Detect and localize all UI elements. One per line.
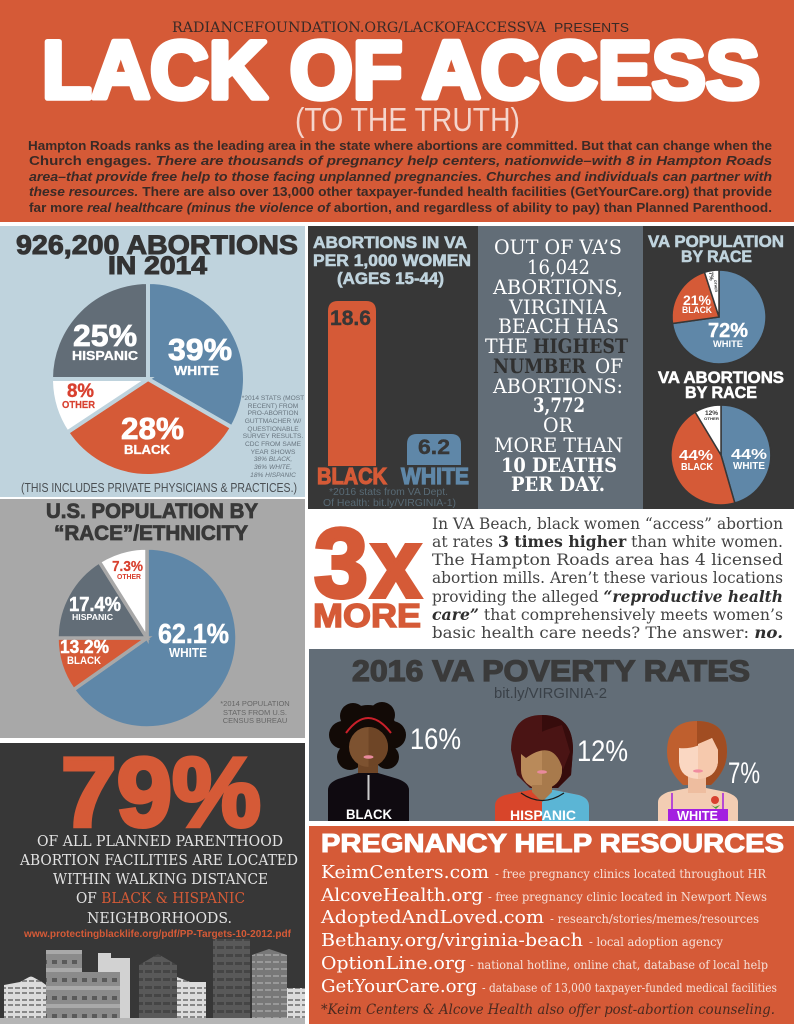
panel: Virginia Beach statement: 10 DEATHS — [501, 454, 617, 477]
big stat: MORE — [313, 597, 421, 634]
resource list — [320, 862, 777, 997]
heading — [313, 233, 471, 288]
footnote: 38% BLACK, — [254, 456, 292, 463]
panel: 3x more — [313, 508, 783, 642]
statement: OF BLACK & HISPANIC — [76, 889, 245, 907]
panel: Virginia Beach statement: 3,772 — [533, 394, 585, 417]
bar: white: WHITE — [401, 463, 469, 489]
pie labels: 28% — [121, 411, 184, 446]
footnote — [323, 487, 456, 509]
big number: 79% — [61, 737, 261, 847]
statement: ABORTION FACILITIES ARE LOCATED — [19, 851, 298, 869]
figure: hispanic woman: HISPANIC — [510, 808, 576, 823]
paragraph: abortion mills. Aren’t these various locations — [432, 569, 783, 587]
panel: 79 percent — [0, 737, 305, 1024]
pie labels — [60, 558, 229, 667]
footnote: STATS FROM U.S. — [223, 708, 287, 717]
pie labels: 17.4% — [69, 594, 121, 616]
labels: VA abortions: 44% — [679, 447, 713, 464]
panel: Virginia Beach statement: VIRGINIA — [508, 296, 608, 319]
big stat — [313, 508, 421, 634]
resource list: - research/stories/memes/resources — [550, 912, 759, 926]
bar: black — [317, 301, 387, 489]
labels: VA population: 72% — [708, 320, 748, 342]
big stat: 3 — [314, 508, 368, 618]
footnote: PRO-ABORTION — [248, 410, 299, 417]
pie labels: 25% — [73, 318, 137, 353]
panel: Virginia Beach statement: 16,042 — [527, 256, 590, 279]
footnote: SURVEY RESULTS. — [243, 433, 303, 440]
resource list: AdoptedAndLoved.com — [320, 907, 544, 928]
pie chart: abortions by race — [51, 282, 245, 476]
label: 12%: 12% — [577, 735, 628, 768]
panel: Virginia Beach statement: OUT OF VA’S — [494, 236, 622, 259]
heading — [46, 500, 258, 545]
subtitle: (TO THE TRUTH) — [295, 101, 520, 138]
labels: VA population: WHITE — [713, 339, 743, 350]
heading: VA abortions: VA ABORTIONS — [658, 368, 784, 387]
panel: U.S. population — [0, 499, 305, 738]
note: (THIS INCLUDES PRIVATE PHYSICIANS & PRACTICES.) — [21, 480, 297, 495]
intro text: Hampton Roads ranks as the leading area in the state where abortions are committed. But that can change when the — [28, 138, 772, 153]
pie labels — [62, 318, 232, 457]
paragraph: providing the alleged “reproductive health — [432, 587, 783, 606]
paragraph: In VA Beach, black women “access” abortion — [432, 515, 783, 533]
title: LACK OF ACCESS — [42, 25, 760, 116]
pie chart: population — [57, 548, 237, 728]
footnote: *2014 POPULATION — [220, 699, 290, 708]
heading: VA population: BY RACE — [681, 247, 752, 266]
paragraph: basic health care needs? The answer: no. — [432, 623, 783, 642]
heading: U.S. POPULATION BY — [46, 500, 258, 523]
pie labels: HISPANIC — [72, 612, 113, 622]
resource list: KeimCenters.com — [321, 862, 489, 883]
resource list: AlcoveHealth.org — [320, 885, 483, 906]
labels: VA abortions: 12% — [705, 411, 719, 417]
resource list: - national hotline, online chat, database of local help — [470, 958, 768, 972]
heading: VA abortions: BY RACE — [685, 383, 757, 402]
labels: VA population — [682, 272, 748, 350]
heading: (AGES 15-44) — [337, 269, 444, 288]
labels: VA abortions: BLACK — [681, 462, 714, 473]
intro text: far more real healthcare (minus the violence of abortion, and regardless of ability to pay) than Planned Parenthood. — [29, 200, 772, 215]
resource list: - local adoption agency — [589, 935, 723, 949]
footnote: Of Health: bit.ly/VIRGINIA-1) — [323, 498, 456, 509]
footer note: *Keim Centers & Alcove Health also offer post-abortion counseling. — [321, 1002, 775, 1018]
bar: white — [401, 434, 469, 489]
labels: VA abortions: OTHER — [704, 416, 719, 421]
panel: header — [0, 0, 794, 222]
statement: OF ALL PLANNED PARENTHOOD — [37, 832, 283, 850]
pie labels: OTHER — [117, 572, 142, 581]
panel: Virginia Beach statement: NUMBER — [493, 355, 587, 378]
panel: abortions per 1,000 women — [308, 226, 478, 509]
pie labels: OTHER — [62, 400, 96, 411]
panel: Virginia Beach statement — [478, 226, 643, 509]
heading: PREGNANCY HELP RESOURCES — [321, 828, 784, 858]
footnote: QUESTIONABLE — [247, 426, 299, 433]
footnote: CDC FROM SAME — [245, 441, 302, 448]
panel: Virginia Beach statement: BEACH HAS — [498, 315, 619, 338]
panel: Virginia Beach statement: ABORTIONS, — [492, 276, 623, 299]
pie labels: BLACK — [124, 442, 171, 457]
labels: VA abortions: 44% — [731, 446, 767, 463]
heading: “RACE”/ETHNICITY — [54, 522, 248, 545]
figure: hispanic woman — [495, 715, 589, 823]
footnote: 18% HISPANIC — [250, 472, 296, 479]
pie labels: 8% — [67, 381, 94, 402]
illustration: city skyline — [0, 939, 305, 1024]
presents line: RADIANCEFOUNDATION.ORG/LACKOFACCESSVA — [172, 20, 546, 36]
paragraph: care” that comprehensively meets women’s — [432, 605, 783, 624]
heading: 2016 VA POVERTY RATES — [352, 655, 750, 688]
panel: Virginia Beach statement: OR — [543, 414, 574, 437]
panel: pregnancy help resources — [309, 826, 794, 1024]
pie labels: HISPANIC — [72, 348, 139, 363]
panel: Virginia Beach statement: PER DAY. — [511, 473, 605, 496]
panel: Virginia Beach statement: OF — [595, 355, 623, 378]
paragraph: The Hampton Roads area has 4 licensed — [432, 551, 783, 569]
statement — [19, 832, 298, 927]
pie labels: WHITE — [169, 646, 207, 660]
labels: VA abortions — [679, 411, 767, 473]
labels: VA population: 21% — [683, 292, 712, 308]
intro text: Church engages. There are thousands of pregnancy help centers, nationwide–with 8 in Hampton Roads — [29, 153, 772, 168]
pie labels: BLACK — [67, 655, 101, 667]
pie chart: VA population — [672, 270, 766, 364]
panel: Virginia Beach statement: ABORTIONS: — [492, 375, 623, 398]
heading: PER 1,000 WOMEN — [313, 251, 471, 270]
intro text: area–that provide free help to those facing unplanned pregnancies. Churches and individuals can partner with — [29, 169, 772, 184]
panel: Virginia Beach statement: THE — [485, 335, 528, 358]
bar: black: 18.6 — [330, 307, 371, 330]
intro text: these resources. There are also over 13,000 other taxpayer-funded health facilities (GetYourCare.org) that provide — [29, 184, 772, 199]
footnote: GUTTMACHER W/ — [245, 418, 301, 425]
heading: 926,200 ABORTIONS — [16, 230, 298, 260]
big stat: x — [371, 508, 421, 618]
footnote: CENSUS BUREAU — [223, 716, 287, 725]
footnote: *2016 stats from VA Dept. — [329, 487, 448, 498]
panel: poverty rates — [309, 649, 794, 823]
resource list: - free pregnancy clinic located in Newport News — [488, 890, 767, 904]
intro text — [28, 138, 772, 215]
figure: black woman — [328, 702, 409, 822]
statement: WITHIN WALKING DISTANCE — [53, 870, 268, 888]
source link: www.protectingblacklife.org/pdf/PP-Targets-10-2012.pdf — [23, 929, 292, 940]
resource list: Bethany.org/virginia-beach — [321, 930, 583, 951]
labels: VA population: BLACK — [682, 305, 712, 316]
footnote — [242, 395, 304, 479]
footnote: YEAR SHOWS — [251, 449, 296, 456]
figure: white woman — [658, 721, 738, 823]
figure: white woman: WHITE — [677, 808, 718, 823]
bar: black: BLACK — [317, 463, 387, 489]
paragraph — [432, 515, 783, 642]
pie chart: VA abortions — [671, 405, 771, 505]
heading: VA population: VA POPULATION — [648, 232, 784, 251]
panel: VA race pies — [643, 226, 794, 509]
pie labels: 13.2% — [60, 637, 109, 657]
heading: IN 2014 — [108, 252, 207, 280]
bar: white: 6.2 — [418, 436, 450, 459]
labels: VA population: OTHER — [713, 280, 718, 293]
panel: Virginia Beach statement: MORE THAN — [494, 434, 623, 457]
presents line: PRESENTS — [554, 20, 629, 35]
figure: black woman: BLACK — [346, 806, 392, 822]
pie labels: 39% — [168, 332, 232, 367]
heading — [16, 230, 298, 280]
pie labels: WHITE — [174, 363, 219, 378]
labels: VA abortions: WHITE — [733, 461, 765, 472]
paragraph: at rates 3 times higher than white women. — [432, 532, 783, 551]
source: bit.ly/VIRGINIA-2 — [494, 685, 607, 702]
resource list: OptionLine.org — [321, 953, 466, 974]
footnote: RECENT) FROM — [248, 403, 298, 410]
panel: Virginia Beach statement: HIGHEST — [533, 335, 628, 358]
statement: NEIGHBORHOODS. — [87, 909, 232, 927]
resource list: GetYourCare.org — [321, 976, 477, 997]
pie labels: 7.3% — [112, 558, 143, 575]
footnote: 36% WHITE, — [254, 464, 292, 471]
pie labels: 62.1% — [158, 618, 229, 649]
label: 16%: 16% — [410, 723, 461, 756]
heading: ABORTIONS IN VA — [313, 233, 467, 252]
heading: VA population — [648, 232, 784, 266]
heading: VA abortions — [658, 368, 784, 402]
label: 7%: 7% — [728, 757, 760, 790]
footnote: *2014 STATS (MOST — [242, 395, 304, 402]
panel: 926,200 abortions — [0, 226, 305, 497]
resource list: - free pregnancy clinics located throughout HR — [495, 867, 767, 881]
labels: VA population: 7% — [707, 272, 714, 281]
footnote — [220, 699, 290, 725]
